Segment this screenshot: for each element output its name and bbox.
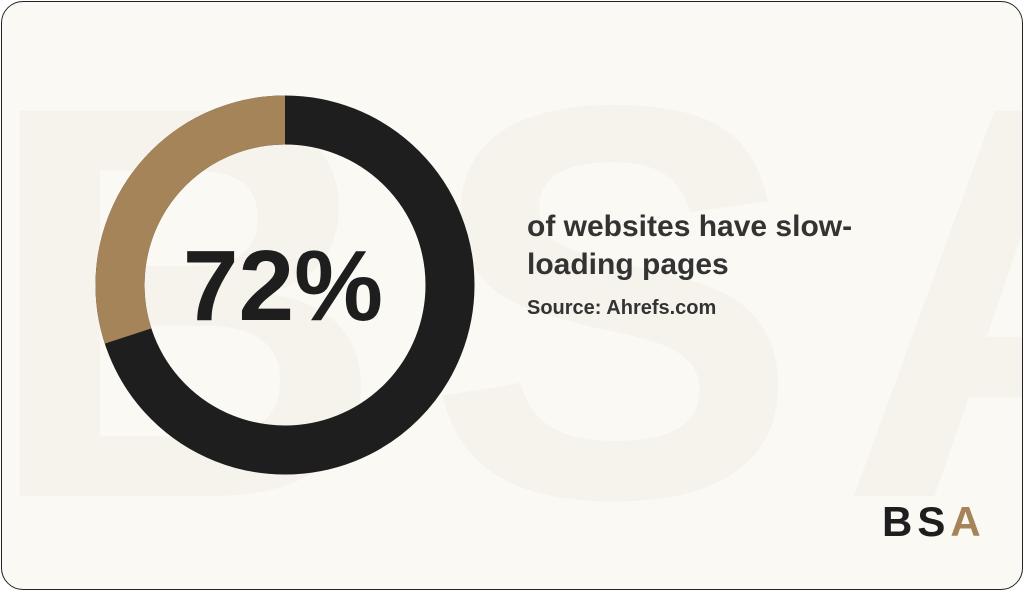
headline text: of websites have slow- — [527, 210, 852, 243]
logo: BSA — [882, 498, 986, 545]
percentage label: 72% — [183, 230, 383, 342]
headline text — [527, 210, 852, 281]
source text: Source: Ahrefs.com — [527, 297, 716, 319]
headline text: loading pages — [527, 248, 729, 281]
